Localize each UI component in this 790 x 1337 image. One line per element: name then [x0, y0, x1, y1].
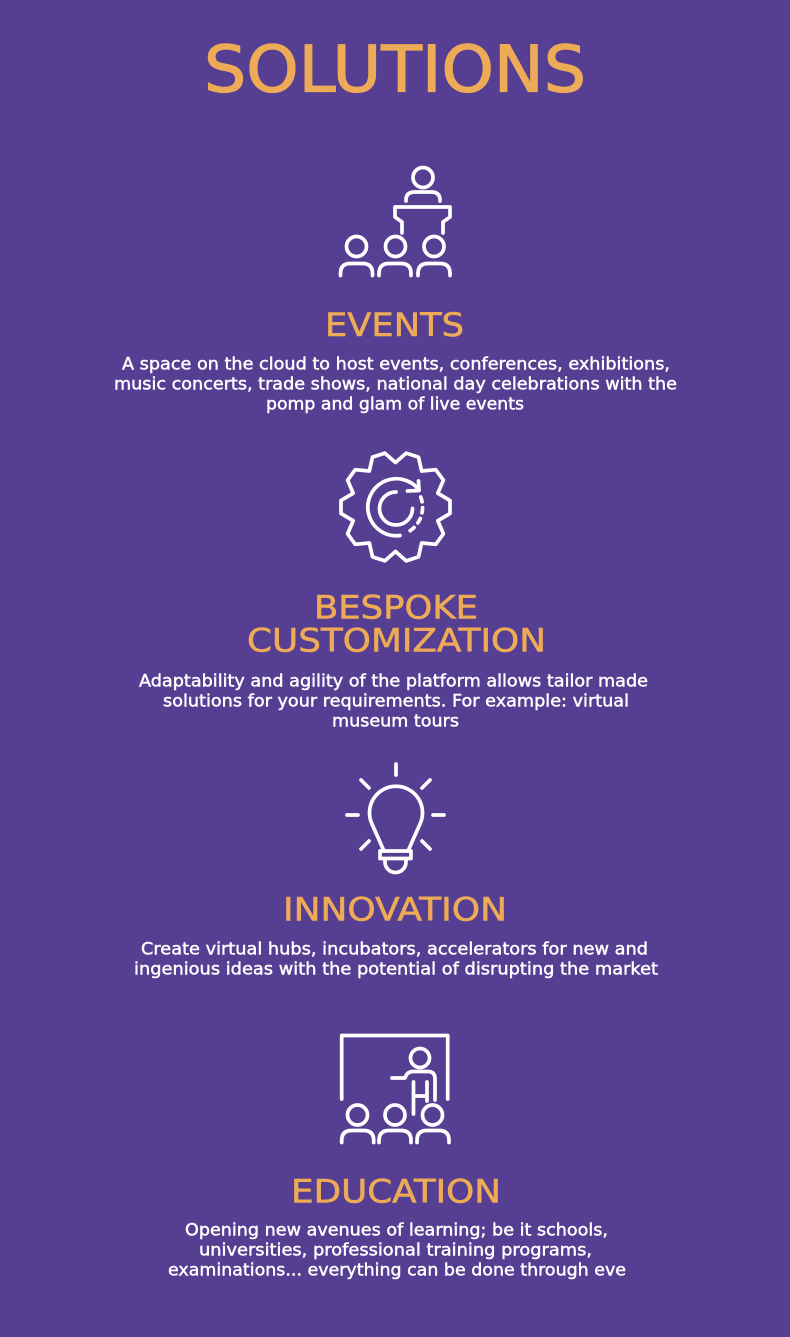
- icon: gear with refresh arrow: [341, 451, 450, 563]
- panel: innovation: [134, 764, 658, 980]
- icon: speaker at podium with audience: [340, 168, 450, 276]
- panel: education: [168, 1036, 626, 1280]
- text block: education description: examinations... everything can be done through eve: [168, 1260, 626, 1280]
- text block: bespoke description: museum tours: [332, 712, 459, 732]
- text block: innovation description: ingenious ideas with the potential of disrupting the market: [134, 960, 658, 980]
- text block: events description: [114, 354, 677, 414]
- text block: events description: pomp and glam of live events: [266, 394, 524, 414]
- text block: events description: music concerts, trade shows, national day celebrations with the: [114, 374, 677, 394]
- panel: bespoke customization: [139, 451, 648, 732]
- heading: events: EVENTS: [325, 306, 464, 344]
- heading: education: EDUCATION: [291, 1172, 501, 1210]
- text block: events description: A space on the cloud to host events, conferences, exhibitions,: [122, 354, 670, 374]
- text block: bespoke description: Adaptability and agility of the platform allows tailor made: [139, 672, 648, 692]
- text block: education description: universities, professional training programs,: [199, 1240, 592, 1260]
- text block: innovation description: [134, 940, 658, 980]
- heading: bespoke customization: CUSTOMIZATION: [247, 622, 546, 660]
- text block: bespoke description: [139, 672, 648, 732]
- heading: bespoke customization: BESPOKE: [314, 588, 478, 626]
- panel: events: [114, 168, 677, 414]
- icon: teacher at board with students: [342, 1036, 449, 1142]
- text block: education description: Opening new avenues of learning; be it schools,: [185, 1220, 608, 1240]
- heading: innovation: INNOVATION: [283, 890, 507, 928]
- text block: bespoke description: solutions for your requirements. For example: virtual: [163, 692, 629, 712]
- title: SOLUTIONS: [204, 34, 586, 108]
- text block: innovation description: Create virtual hubs, incubators, accelerators for new and: [141, 940, 648, 960]
- text block: education description: [168, 1220, 626, 1280]
- icon: light bulb: [347, 764, 444, 872]
- heading: bespoke customization: [247, 588, 546, 660]
